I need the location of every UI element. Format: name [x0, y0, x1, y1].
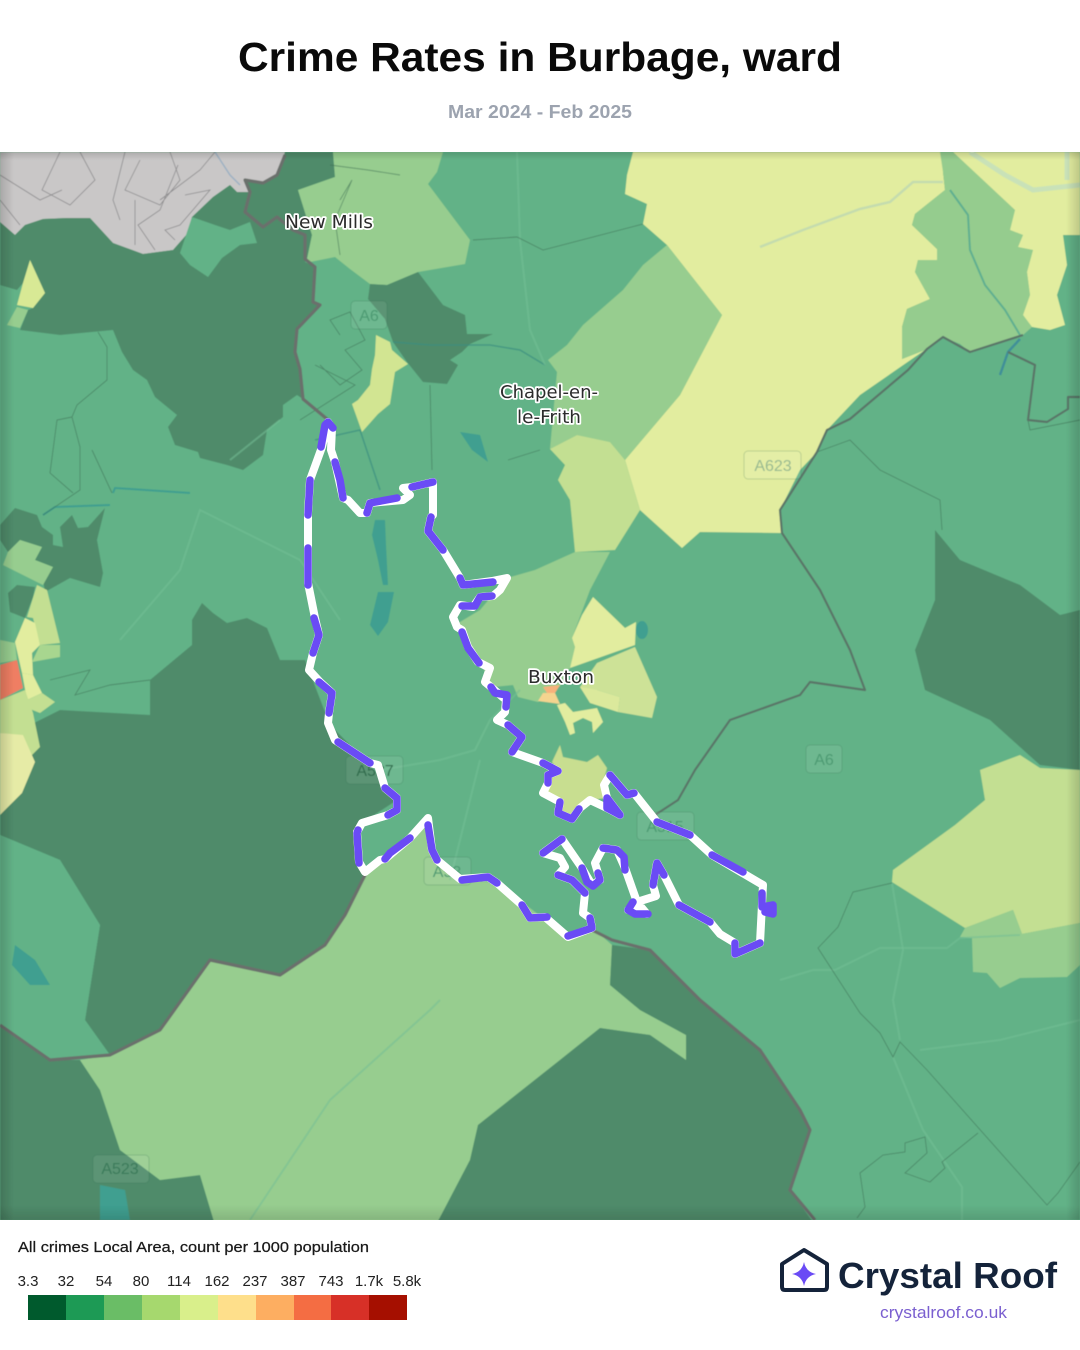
legend scale labels: 387 — [280, 1273, 306, 1290]
icon: house with star — [782, 1250, 827, 1290]
region: Buxton centre orange — [543, 685, 560, 693]
vignette — [0, 152, 1080, 1220]
legend scale labels: 114 — [167, 1273, 191, 1290]
region: Buxton south pale — [557, 703, 603, 735]
legend scale labels: 5.8k — [393, 1273, 422, 1290]
faint roads — [120, 152, 1080, 1220]
place labels: Chapel-en- — [500, 382, 598, 403]
region: pale strip by A6 — [352, 335, 408, 432]
place labels: New Mills — [285, 212, 373, 233]
road badges — [93, 301, 842, 1183]
region: far-west cluster — [0, 508, 105, 815]
legend scale labels — [18, 1273, 422, 1290]
legend — [18, 1239, 422, 1320]
region: column south of Chapel — [550, 435, 640, 552]
region: Buxton south-east — [580, 647, 657, 718]
title: Crime Rates in Burbage, ward — [238, 34, 842, 80]
region: lighter patch below Manchester — [180, 217, 257, 277]
boundary dashes: purple — [308, 422, 773, 954]
place labels — [285, 212, 598, 688]
legend scale labels: 237 — [242, 1273, 268, 1290]
region: dark central west — [0, 603, 397, 1055]
region: east light — [960, 910, 1080, 988]
road badges: A523 — [101, 1161, 139, 1178]
logo: Crystal Roof — [782, 1250, 1058, 1322]
region: Greater Manchester no-data area — [0, 152, 287, 254]
legend scale labels: 3.3 — [18, 1273, 38, 1290]
place labels: Buxton — [528, 667, 594, 688]
road badges: A537 — [356, 763, 394, 780]
region: Burbage yellow-green — [548, 745, 608, 814]
region: pale patch west — [17, 260, 45, 308]
subtitle: date range: Mar 2024 - Feb 2025 — [448, 102, 632, 122]
region: dark east — [915, 530, 1080, 770]
region: dark patch by A6 — [368, 272, 493, 384]
road badges: A515 — [646, 819, 684, 836]
region: Chapel-en-le-Frith light area — [548, 245, 722, 460]
legend scale labels: 162 — [204, 1273, 230, 1290]
logo url: crystalroof.co.uk — [880, 1304, 1008, 1322]
ward boundary: Burbage — [308, 422, 773, 954]
region: New Mills light area — [298, 152, 470, 285]
legend scale labels: 32 — [58, 1273, 74, 1290]
region: dark bottom centre — [436, 945, 815, 1225]
road badges: A6 — [359, 308, 379, 325]
region: dark north-west area — [0, 152, 335, 470]
water: reservoirs and rivers — [12, 432, 648, 1220]
region: northern pale area — [625, 152, 945, 548]
place labels: le-Frith — [517, 407, 581, 428]
region: north-east light area — [902, 152, 1033, 359]
legend scale labels: 54 — [96, 1273, 112, 1290]
map base layers — [0, 147, 1080, 1225]
region: Buxton centre amber — [538, 693, 560, 704]
road badges: A6 — [814, 752, 834, 769]
road badges: A53 — [433, 864, 461, 881]
thin ward boundaries — [43, 165, 1080, 1218]
road badges: A623 — [754, 458, 792, 475]
region: large southern light area — [80, 820, 686, 1225]
region: east yellow-green — [892, 755, 1080, 934]
logo wordmark: Crystal Roof — [838, 1255, 1058, 1296]
region: Buxton east pale — [570, 597, 636, 668]
choropleth map — [0, 147, 1080, 1225]
county boundary lines — [0, 155, 815, 1220]
legend scale labels: 80 — [133, 1273, 149, 1290]
region: top right pale — [953, 152, 1080, 330]
boundary base: white — [308, 422, 763, 954]
region: south-west main — [0, 835, 110, 1060]
legend title: All crimes Local Area, count per 1000 population — [18, 1239, 369, 1256]
region: dark bottom left — [0, 1025, 215, 1225]
legend scale labels: 743 — [318, 1273, 344, 1290]
legend colour scale — [28, 1295, 407, 1320]
legend scale labels: 1.7k — [355, 1273, 384, 1290]
region: Buxton north light area — [455, 552, 610, 702]
